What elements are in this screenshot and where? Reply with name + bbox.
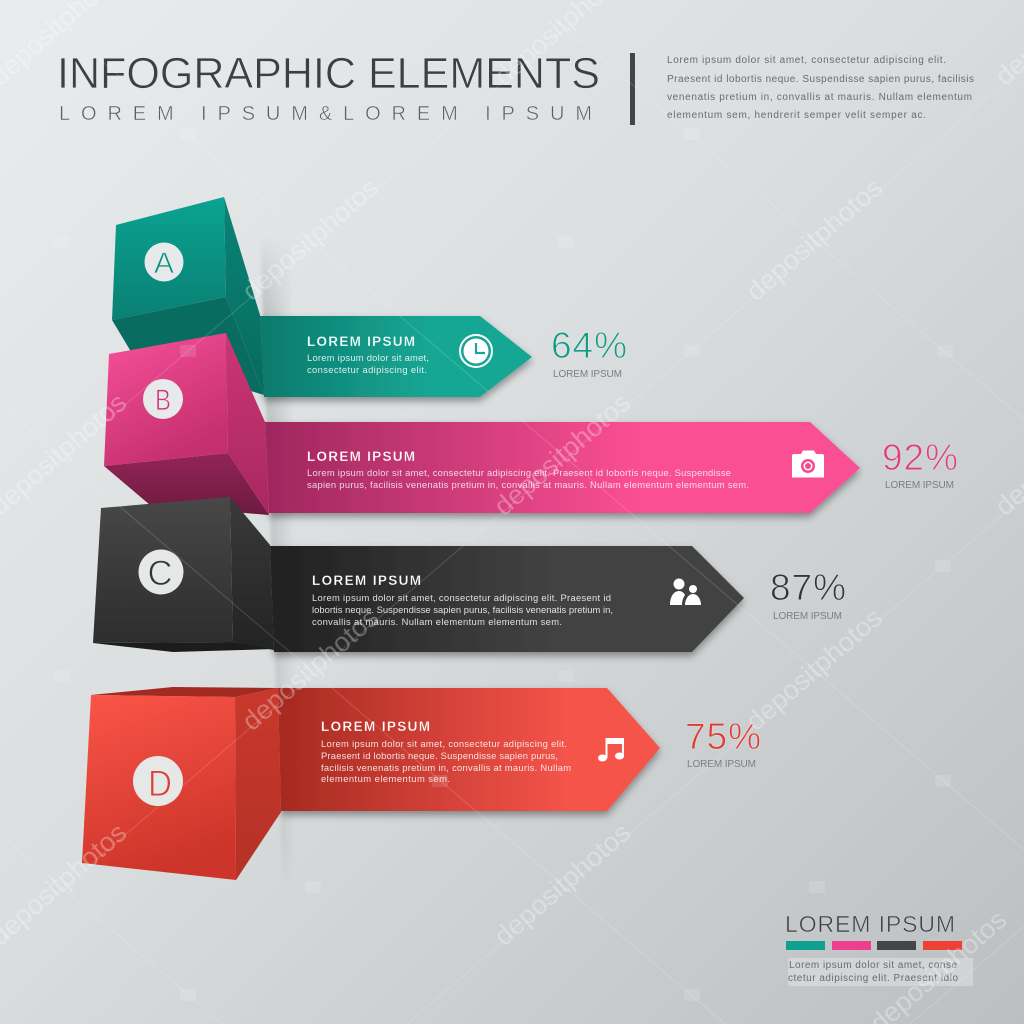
icon: music note: [598, 738, 624, 762]
badge D: D: [148, 763, 172, 804]
arrow bar C: [270, 546, 744, 652]
body A: consectetur adipiscing elit.: [307, 364, 427, 375]
badge C: C: [148, 554, 172, 593]
value C: LOREM IPSUM: [773, 611, 842, 622]
body A: [307, 352, 429, 375]
watermark overlay: depositphotos: [740, 602, 888, 737]
badge B: [143, 379, 183, 419]
watermark overlay: depositphotos: [488, 387, 636, 522]
badge D: [133, 756, 183, 806]
legend swatches: [786, 941, 962, 950]
body D: Praesent id lobortis neque. Suspendisse sapien purus,: [321, 750, 558, 761]
body D: Lorem ipsum dolor sit amet, consectetur adipiscing elit.: [321, 738, 567, 749]
arrow bar A: [260, 316, 532, 397]
heading C: LOREM IPSUM: [312, 573, 421, 588]
icon: people: [670, 578, 701, 605]
value C: 87%: [770, 567, 846, 608]
body B: sapien purus, facilisis venenatis pretium in, convallis at mauris. Nullam elementum elementum sem.: [307, 479, 749, 490]
watermark overlay: depositphotos: [488, 817, 636, 952]
value D: LOREM IPSUM: [687, 759, 756, 770]
heading A: LOREM IPSUM: [307, 334, 415, 349]
intro paragraph: [667, 55, 974, 121]
value A: 64%: [551, 325, 627, 366]
arrow bar D: [278, 688, 660, 811]
body A: Lorem ipsum dolor sit amet,: [307, 352, 429, 363]
title: INFOGRAPHIC ELEMENTS: [57, 49, 600, 98]
heading B: LOREM IPSUM: [307, 449, 415, 464]
watermark overlay: depositphotos: [236, 602, 384, 737]
intro paragraph: Lorem ipsum dolor sit amet, consectetur adipiscing elit.: [667, 55, 946, 66]
cube D: [82, 687, 281, 880]
intro paragraph: elementum sem, hendrerit semper velit semper ac.: [667, 110, 926, 121]
body D: [321, 738, 571, 784]
arrow bar B: [265, 422, 860, 513]
legend text: [788, 958, 973, 986]
badge B: B: [155, 384, 171, 417]
cube A: [112, 197, 264, 395]
legend title: LOREM IPSUM: [785, 911, 955, 937]
body B: [307, 467, 749, 490]
badge A: [144, 242, 184, 282]
watermark overlay: depositphotos: [740, 172, 888, 307]
cube C: [93, 497, 274, 652]
intro paragraph: Praesent id lobortis neque. Suspendisse sapien purus, facilisis: [667, 74, 974, 85]
body D: elementum elementum sem.: [321, 773, 450, 784]
wall shadow: [261, 252, 288, 851]
subtitle: LOREM IPSUM&LOREM IPSUM: [59, 103, 592, 125]
vertical divider: [630, 53, 635, 125]
body C: [312, 592, 613, 627]
badge A: A: [154, 247, 174, 280]
body D: facilisis venenatis pretium in, convallis at mauris. Nullam: [321, 762, 571, 773]
heading D: LOREM IPSUM: [321, 719, 430, 734]
body B: Lorem ipsum dolor sit amet, consectetur adipiscing elit. Praesent id lobortis neque. Suspendisse: [307, 467, 731, 478]
legend text: Lorem ipsum dolor sit amet, conse: [789, 960, 957, 971]
value B: LOREM IPSUM: [885, 480, 954, 491]
value B: 92%: [882, 437, 958, 478]
body C: convallis at mauris. Nullam elementum elementum sem.: [312, 616, 562, 627]
cube B: [104, 333, 269, 515]
watermark overlay: depositphotos: [236, 172, 384, 307]
legend text: ctetur adipiscing elit. Praesent idlo: [788, 973, 958, 984]
badge C: [138, 550, 184, 594]
legend: [785, 911, 973, 986]
body C: Lorem ipsum dolor sit amet, consectetur adipiscing elit. Praesent id: [312, 592, 611, 603]
value A: LOREM IPSUM: [553, 369, 622, 380]
intro paragraph: venenatis pretium in, convallis at mauris. Nullam elementum: [667, 92, 972, 103]
icon: clock: [460, 335, 492, 367]
icon: camera: [792, 450, 824, 478]
value D: 75%: [685, 716, 761, 757]
body C: lobortis neque. Suspendisse sapien purus, facilisis venenatis pretium in,: [312, 604, 613, 615]
